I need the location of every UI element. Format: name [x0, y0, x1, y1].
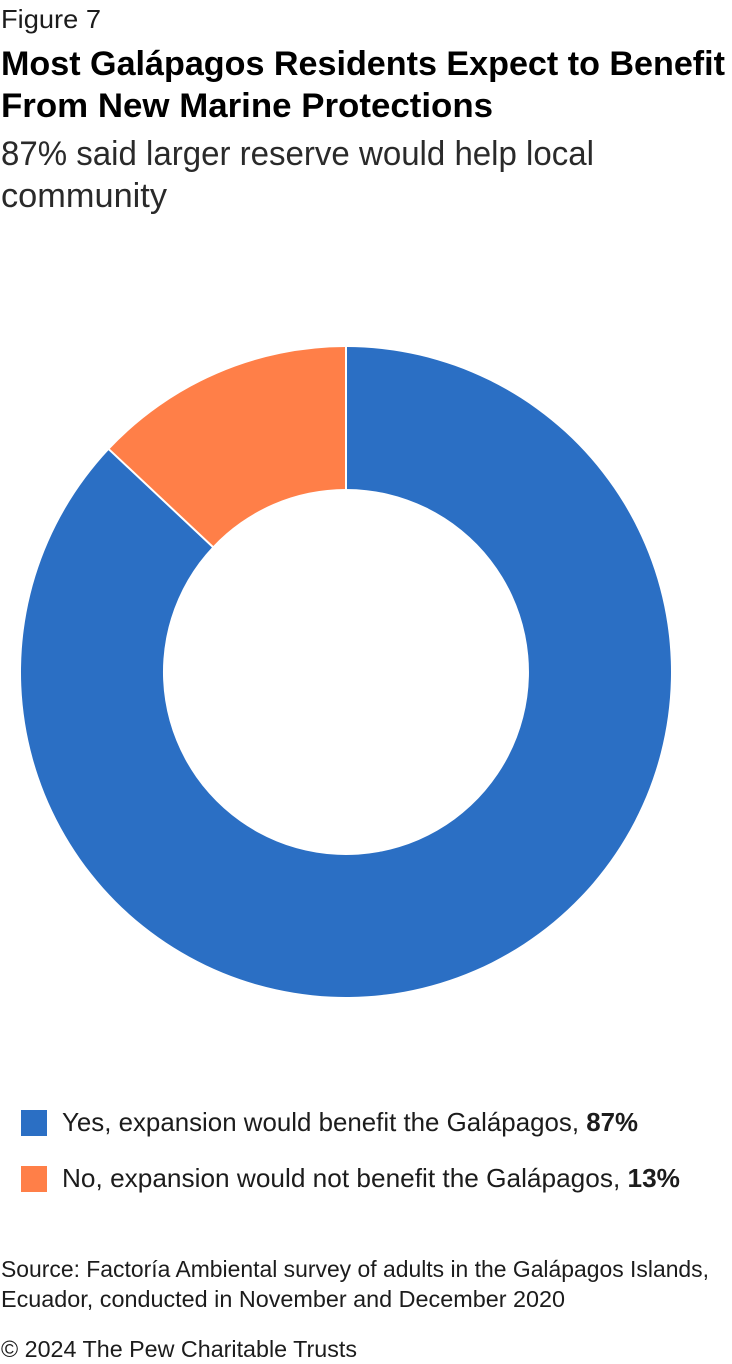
donut chart — [21, 346, 671, 997]
subtitle: community — [1, 177, 167, 215]
figure label: Figure 7 — [1, 4, 101, 34]
segment: yes 87% — [21, 347, 671, 997]
legend label: no: No, expansion would not benefit the Galápagos, 13% — [62, 1163, 680, 1193]
title: Most Galápagos Residents Expect to Benefit — [1, 45, 725, 83]
subtitle — [1, 135, 594, 215]
legend swatch: no — [21, 1166, 47, 1192]
source note: Source: Factoría Ambiental survey of adults in the Galápagos Islands, — [1, 1256, 709, 1282]
subtitle: 87% said larger reserve would help local — [1, 135, 594, 173]
source note — [1, 1256, 709, 1312]
legend label: yes: Yes, expansion would benefit the Galápagos, 87% — [62, 1107, 638, 1137]
title: From New Marine Protections — [1, 87, 493, 125]
legend — [21, 1107, 680, 1193]
source note: Ecuador, conducted in November and December 2020 — [1, 1286, 565, 1312]
segment: no 13% — [109, 347, 346, 547]
legend swatch: yes — [21, 1110, 47, 1136]
title — [1, 45, 725, 125]
copyright: © 2024 The Pew Charitable Trusts — [1, 1336, 357, 1362]
